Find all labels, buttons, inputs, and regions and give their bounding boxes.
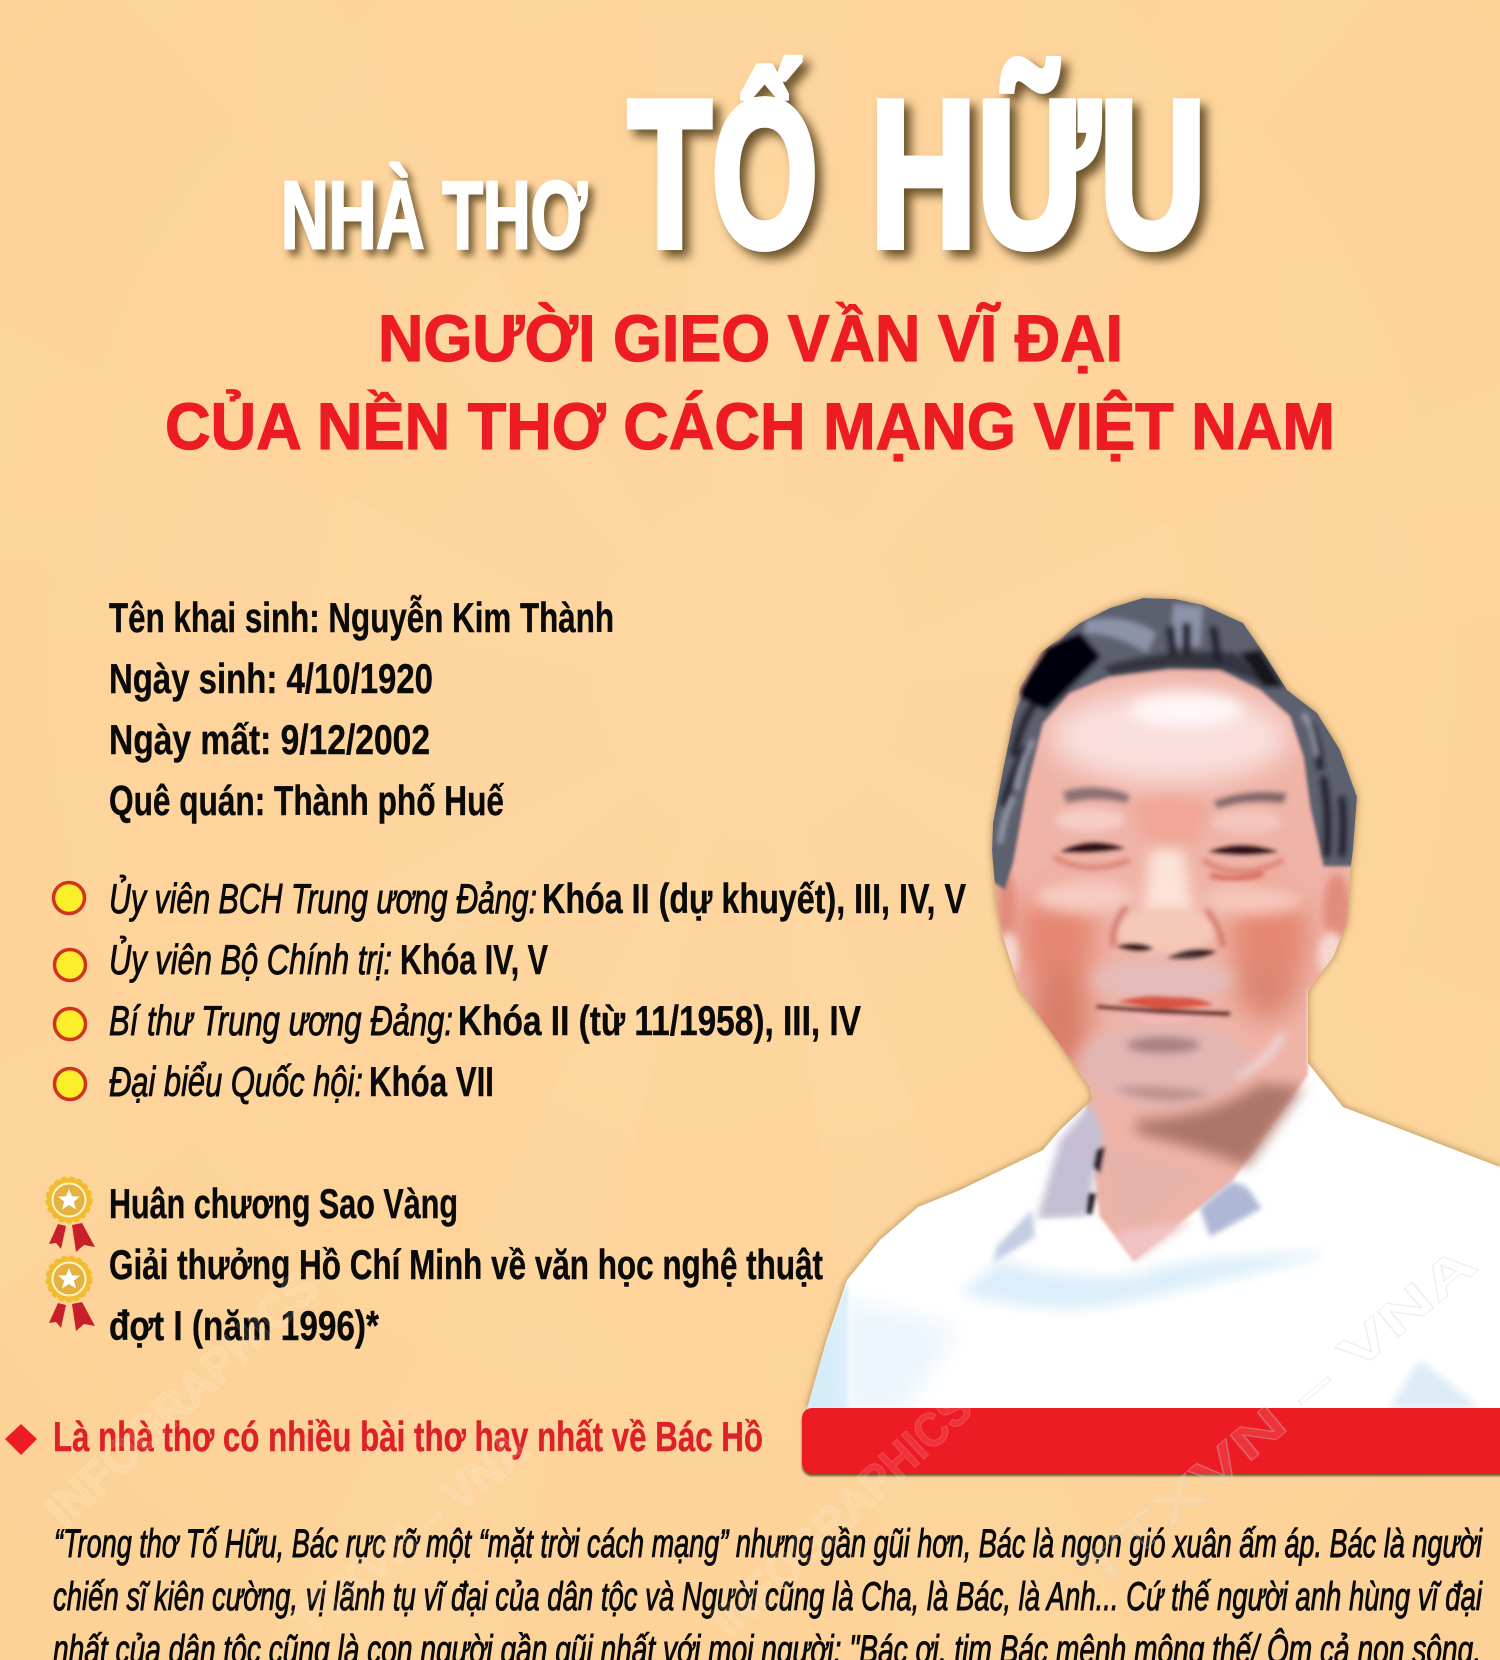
highlight statement: Là nhà thơ có nhiều bài thơ hay nhất về Bác Hồ bbox=[53, 1413, 763, 1460]
hair shine bbox=[1083, 603, 1203, 653]
hair streaks bbox=[1003, 623, 1343, 857]
award 2 continued: đợt I (năm 1996)* bbox=[109, 1302, 380, 1349]
under-eye folds bbox=[1053, 857, 1283, 872]
birth date: Ngày sinh: 4/10/1920 bbox=[109, 655, 433, 702]
position 4: Đại biểu Quốc hội: bbox=[109, 1058, 363, 1105]
watermarks bbox=[36, 1236, 1487, 1648]
left shirt collar bbox=[1037, 1102, 1103, 1220]
right ear bbox=[1323, 873, 1350, 947]
awards bbox=[109, 1180, 823, 1349]
title: tố hữu: HỮU bbox=[870, 58, 1206, 291]
neck shadow bbox=[1137, 1083, 1303, 1167]
right collar shade bbox=[1200, 1182, 1262, 1237]
lips bbox=[1117, 996, 1213, 1010]
subtitle line 2: CỦA NỀN THƠ CÁCH MẠNG VIỆT NAM bbox=[165, 389, 1335, 463]
neck light bbox=[1095, 1157, 1184, 1217]
bullet 1 bbox=[54, 882, 84, 914]
positions list bbox=[54, 873, 966, 1105]
eyebrows bbox=[1063, 787, 1130, 803]
white collar flap bbox=[1040, 1218, 1134, 1262]
left ear bbox=[997, 873, 1017, 947]
title: tố hữu: TỐ bbox=[628, 57, 818, 291]
shirt blue tint bbox=[960, 1253, 1333, 1309]
hair bbox=[983, 590, 1370, 890]
position 2: Khóa IV, V bbox=[400, 936, 548, 983]
skin base bbox=[995, 630, 1351, 1262]
nose wings bbox=[1113, 907, 1223, 947]
right sleeve tint bbox=[1390, 1360, 1480, 1408]
position 3 bbox=[109, 997, 861, 1044]
position 4: Khóa VII bbox=[369, 1058, 494, 1105]
position 3: Bí thư Trung ương Đảng: bbox=[109, 997, 453, 1044]
position 1 bbox=[109, 873, 966, 922]
hair dark patch left bbox=[1020, 633, 1100, 710]
birth name: Tên khai sinh: Nguyễn Kim Thành bbox=[109, 593, 614, 641]
lower face and neck details bbox=[960, 953, 1333, 1309]
biography block bbox=[109, 593, 614, 824]
chin crease bbox=[1113, 1087, 1210, 1101]
left sleeve tint bbox=[807, 1282, 850, 1409]
brow area bbox=[1133, 797, 1210, 843]
deep cheeks bbox=[1030, 960, 1090, 1073]
hometown: Quê quán: Thành phố Huế bbox=[109, 777, 504, 824]
hair dark band bbox=[1103, 652, 1263, 683]
position 2: Ủy viên Bộ Chính trị: bbox=[109, 934, 392, 983]
jaw highlight bbox=[1237, 1032, 1287, 1080]
watermarks: INFOGRAPHICS bbox=[36, 1261, 328, 1538]
quote bbox=[53, 1522, 1483, 1660]
subtitle bbox=[165, 301, 1335, 463]
award 2: Giải thưởng Hồ Chí Minh về văn học nghệ thuật bbox=[109, 1241, 823, 1288]
bullet 3 bbox=[54, 1008, 86, 1040]
position 1: Khóa II (dự khuyết), III, IV, V bbox=[542, 875, 966, 922]
portrait figure bbox=[780, 580, 1500, 1420]
title: nhà thơ: NHÀ THƠ bbox=[281, 162, 587, 269]
title bbox=[281, 57, 1206, 291]
award 1: Huân chương Sao Vàng bbox=[109, 1180, 458, 1227]
icon: red diamond bbox=[5, 1424, 37, 1455]
icon: medal 2 bbox=[47, 1257, 95, 1331]
icon: medal 1 bbox=[47, 1178, 95, 1252]
title: tố hữu bbox=[628, 57, 1206, 291]
soft painted layers bbox=[800, 590, 1480, 1410]
eyelids bbox=[1055, 808, 1125, 832]
forehead bbox=[1050, 690, 1290, 783]
left collar shade bbox=[993, 1210, 1035, 1263]
portrait shadow bbox=[807, 598, 1500, 1409]
nostrils bbox=[1117, 944, 1153, 951]
watermarks: TTXVN – VNA bbox=[1070, 1236, 1487, 1598]
under-lip shadow bbox=[1127, 1037, 1200, 1053]
upper head details bbox=[983, 590, 1370, 987]
lower face bbox=[1075, 1025, 1242, 1102]
red bar bbox=[802, 1408, 1500, 1473]
hair dark patch right bbox=[1240, 650, 1283, 687]
watermarks: TTXVN – VNA bbox=[283, 1421, 539, 1648]
watermarks: INFOGRAPHICS bbox=[701, 1381, 983, 1648]
bullet 2 bbox=[54, 950, 86, 980]
philtrum bbox=[1093, 960, 1233, 1000]
death date: Ngày mất: 9/12/2002 bbox=[109, 716, 430, 763]
portrait bbox=[780, 580, 1500, 1420]
bullet 4 bbox=[54, 1068, 86, 1100]
subtitle line 1: NGƯỜI GIEO VẦN VĨ ĐẠI bbox=[378, 301, 1123, 375]
nose bridge bbox=[1143, 847, 1193, 920]
position 3: Khóa II (từ 11/1958), III, IV bbox=[458, 997, 861, 1044]
eyes bbox=[1060, 842, 1125, 853]
position 1: Ủy viên BCH Trung ương Đảng: bbox=[109, 873, 537, 922]
cheek tones bbox=[1017, 887, 1097, 987]
